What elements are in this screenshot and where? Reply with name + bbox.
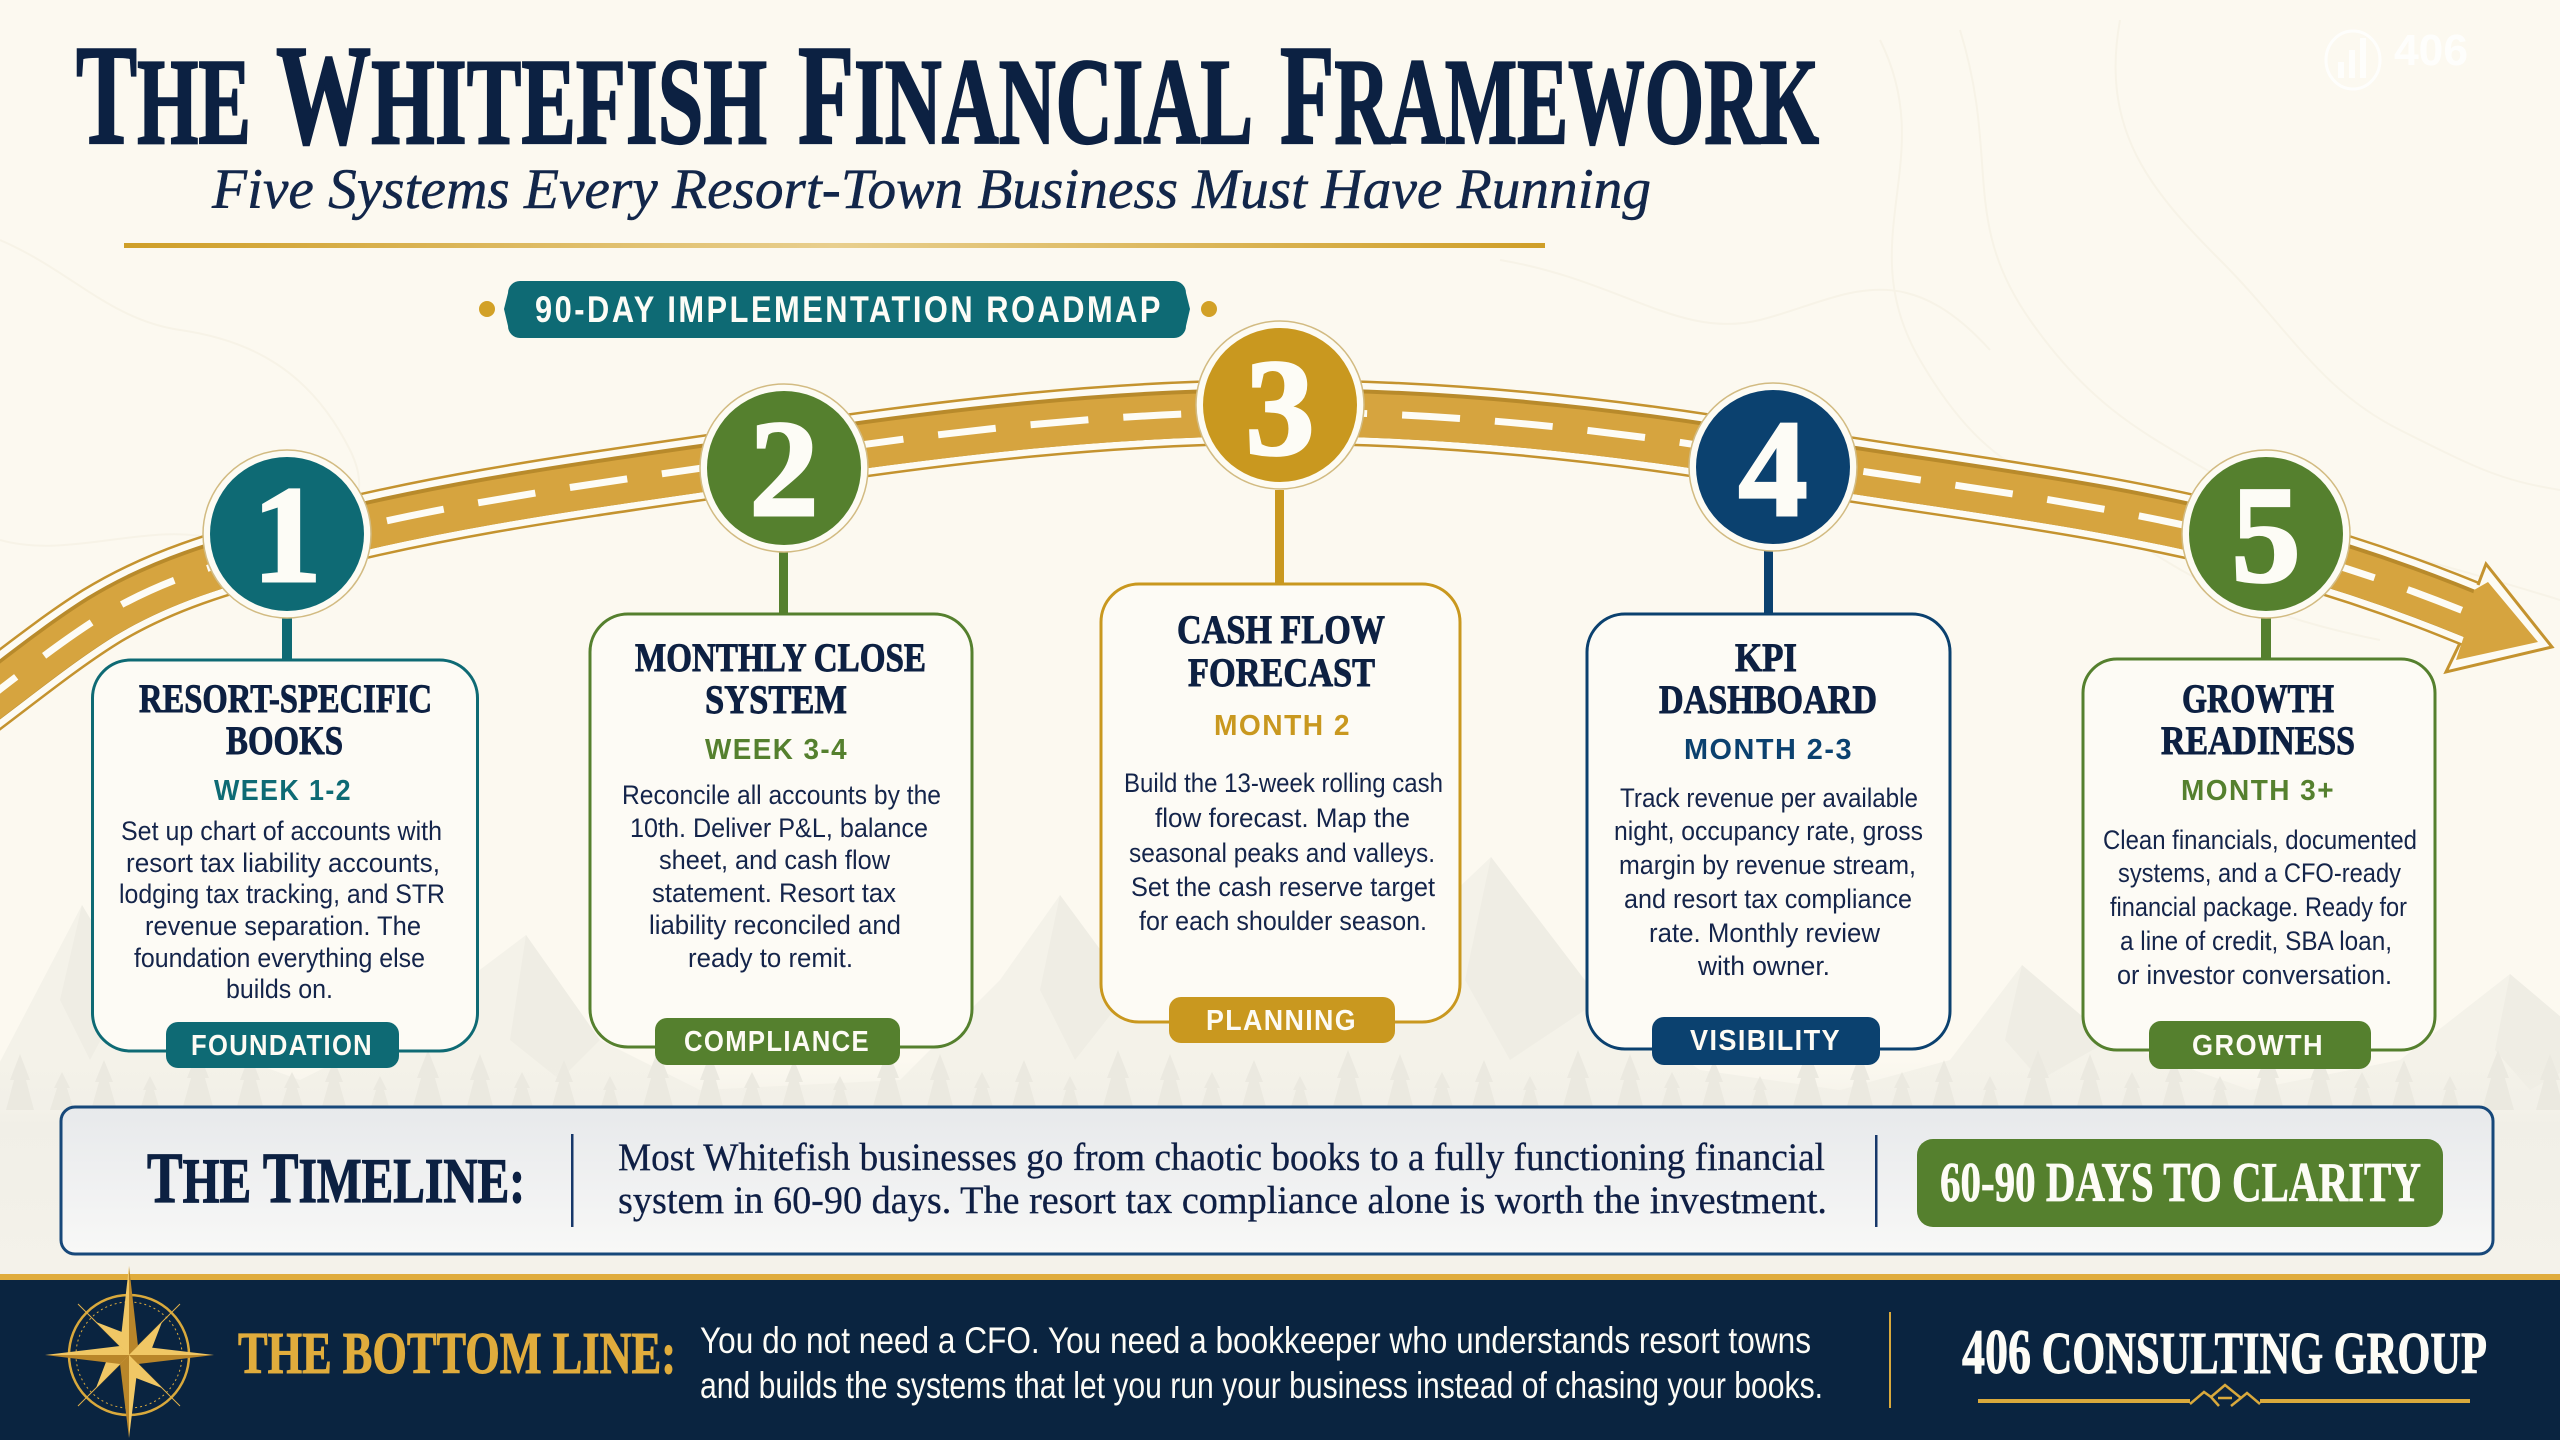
- panel: growth readiness: [2083, 659, 2435, 1069]
- panel: monthly close system: WEEK 3-4: [705, 734, 848, 766]
- panel: cash flow forecast: for each shoulder season.: [1139, 906, 1427, 936]
- panel: resort-specific books: [92, 660, 478, 1068]
- panel: monthly close system: sheet, and cash flow: [659, 845, 890, 875]
- panel: kpi dashboard: with owner.: [1697, 951, 1830, 981]
- panel: kpi dashboard: [1587, 614, 1950, 1065]
- panel: cash flow forecast: CASH FLOW: [1177, 607, 1385, 652]
- step badge 5: [2182, 450, 2350, 618]
- panel: kpi dashboard: rate. Monthly review: [1649, 918, 1880, 948]
- panel: kpi dashboard: VISIBILITY: [1690, 1025, 1841, 1057]
- panel: cash flow forecast: PLANNING: [1206, 1005, 1357, 1037]
- panel: growth readiness: MONTH 3+: [2181, 775, 2335, 807]
- panel: the timeline: system in 60-90 days. The resort tax compliance alone is worth the investment.: [618, 1179, 1827, 1222]
- background: mountain range: [0, 857, 2560, 1274]
- bottom line heading: THE BOTTOM LINE:: [238, 1320, 676, 1386]
- step badge 5: 5: [2232, 458, 2300, 611]
- panel: growth readiness: systems, and a CFO-ready: [2118, 858, 2401, 888]
- panel: monthly close system: MONTHLY CLOSE: [635, 635, 926, 680]
- step badge 4: 4: [1738, 392, 1808, 545]
- roadmap banner: [479, 281, 1217, 338]
- connector stems: [282, 490, 2271, 661]
- step badge 3: [1196, 321, 1364, 489]
- subtitle: Five Systems Every Resort-Town Business Must Have Running: [211, 158, 1651, 221]
- panel: kpi dashboard: Track revenue per available: [1620, 783, 1918, 813]
- panel: monthly close system: Reconcile all accounts by the: [622, 780, 941, 810]
- watermark logo: [2326, 26, 2468, 89]
- bottom line text: You do not need a CFO. You need a bookkeeper who understands resort towns: [700, 1320, 1811, 1361]
- bottom line text: and builds the systems that let you run your business instead of chasing your books.: [700, 1365, 1823, 1406]
- panel: kpi dashboard: and resort tax compliance: [1624, 884, 1912, 914]
- panel: monthly close system: SYSTEM: [705, 677, 847, 722]
- title: FINANCIAL: [798, 16, 1253, 174]
- panel: monthly close system: 10th. Deliver P&L, balance: [630, 813, 928, 843]
- panel: cash flow forecast: seasonal peaks and valleys.: [1129, 838, 1435, 868]
- panel: kpi dashboard: KPI: [1735, 635, 1797, 680]
- title: [76, 16, 1819, 174]
- panel: monthly close system: [590, 614, 972, 1065]
- panel: growth readiness: GROWTH: [2182, 676, 2334, 721]
- panel: cash flow forecast: MONTH 2: [1214, 710, 1351, 742]
- road arrow: [0, 412, 2552, 714]
- watermark logo: 406: [2394, 26, 2468, 75]
- panel: kpi dashboard: margin by revenue stream,: [1619, 850, 1916, 880]
- background: topographic lines: [0, 20, 2560, 640]
- panel: monthly close system: ready to remit.: [688, 943, 853, 973]
- step badge 1: 1: [252, 458, 322, 611]
- roadmap banner: 90-DAY IMPLEMENTATION ROADMAP: [535, 289, 1163, 330]
- panel: growth readiness: financial package. Ready for: [2110, 892, 2407, 922]
- icon: compass rose: [45, 1266, 214, 1438]
- step badge 2: 2: [750, 392, 818, 545]
- panel: resort-specific books: Set up chart of accounts with: [121, 816, 442, 846]
- title rule: [124, 243, 1545, 248]
- panel: resort-specific books: FOUNDATION: [191, 1030, 373, 1062]
- panel: kpi dashboard: DASHBOARD: [1659, 677, 1877, 722]
- step badge 4: [1689, 383, 1857, 551]
- panel: monthly close system: statement. Resort tax: [652, 878, 896, 908]
- panel: resort-specific books: resort tax liability accounts,: [126, 848, 440, 878]
- step badge 1: [203, 450, 371, 618]
- panel: growth readiness: READINESS: [2161, 718, 2355, 763]
- title: THE: [76, 16, 251, 174]
- panel: monthly close system: liability reconciled and: [649, 910, 901, 940]
- panel: monthly close system: COMPLIANCE: [684, 1026, 870, 1058]
- panel: kpi dashboard: night, occupancy rate, gross: [1614, 816, 1923, 846]
- panel: resort-specific books: foundation everything else: [134, 943, 425, 973]
- step badge 2: [700, 384, 868, 552]
- bottom line text: [700, 1320, 1823, 1406]
- panel: cash flow forecast: FORECAST: [1188, 650, 1375, 695]
- panel: cash flow forecast: [1101, 584, 1460, 1043]
- footer band: [0, 1274, 2560, 1440]
- panel: the timeline: Most Whitefish businesses go from chaotic books to a fully functioning financial: [618, 1136, 1825, 1179]
- panel: cash flow forecast: flow forecast. Map the: [1155, 803, 1410, 833]
- footer divider: [1889, 1312, 1891, 1408]
- panel: resort-specific books: WEEK 1-2: [214, 775, 352, 807]
- panel: resort-specific books: revenue separation. The: [145, 911, 421, 941]
- panel: cash flow forecast: Set the cash reserve target: [1131, 872, 1435, 902]
- panel: growth readiness: a line of credit, SBA loan,: [2120, 926, 2392, 956]
- panel: cash flow forecast: Build the 13-week rolling cash: [1124, 768, 1443, 798]
- panel: the timeline: [61, 1107, 2493, 1254]
- panel: resort-specific books: lodging tax tracking, and STR: [119, 879, 445, 909]
- panel: kpi dashboard: MONTH 2-3: [1684, 734, 1853, 766]
- panel: resort-specific books: builds on.: [226, 974, 333, 1004]
- panel: the timeline: THE TIMELINE:: [147, 1138, 525, 1218]
- panel: growth readiness: GROWTH: [2192, 1030, 2324, 1062]
- panel: resort-specific books: BOOKS: [226, 718, 343, 763]
- title: FRAMEWORK: [1280, 16, 1819, 174]
- panel: growth readiness: Clean financials, documented: [2103, 825, 2417, 855]
- panel: resort-specific books: RESORT-SPECIFIC: [139, 676, 432, 721]
- title: WHITEFISH: [276, 16, 767, 174]
- panel: growth readiness: or investor conversation.: [2117, 960, 2392, 990]
- step badge 3: 3: [1246, 331, 1314, 484]
